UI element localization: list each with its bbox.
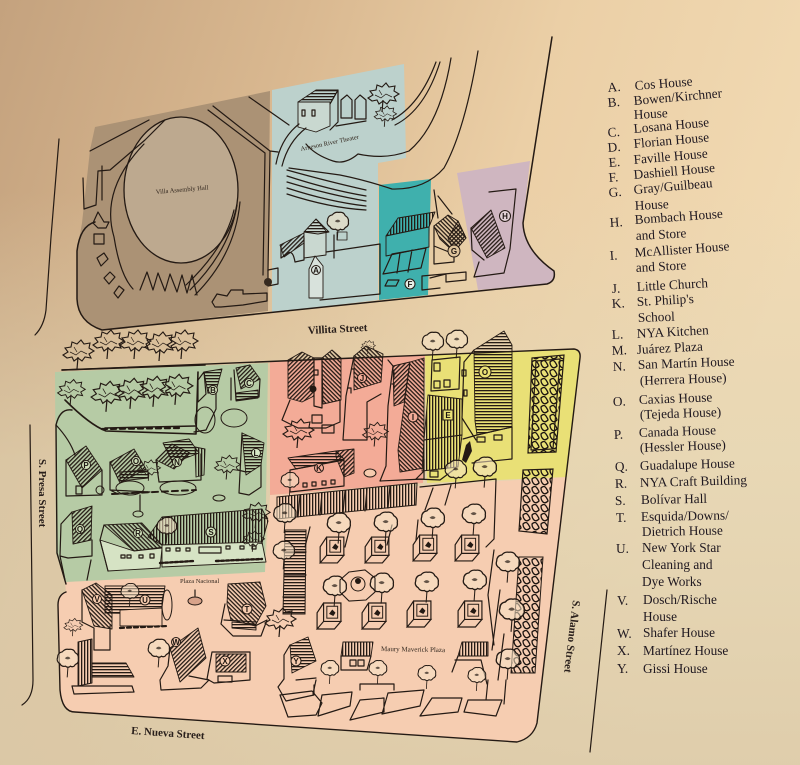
legend: building key: F. (608, 169, 619, 185)
building: I, McAllister House: I (412, 413, 414, 422)
tree rows at the north-west (58, 330, 198, 412)
legend: building key: Gissi House (643, 661, 708, 676)
zone: peach, plazas (58, 477, 567, 742)
building: U, Esquida/Downs/Dietrich: U (142, 596, 148, 605)
legend: building key: W. (617, 626, 632, 641)
building: B, Bowen/Kirchner House (194, 369, 222, 433)
legend: building key: (Herrera House) (640, 370, 727, 388)
building: C, Losana House: C (246, 379, 252, 388)
buildings in yellow zone (416, 330, 564, 534)
legend: building key: Losana House (633, 114, 710, 136)
west arcade (283, 530, 306, 614)
building: C, Losana House (221, 365, 260, 427)
legend: building key: School (638, 309, 675, 325)
street curbs (35, 51, 478, 335)
building: L, NYA Kitchen: L (254, 449, 259, 458)
bleacher structure (140, 272, 197, 295)
S. Alamo curb line (590, 590, 607, 752)
walls of hall grounds (90, 97, 289, 275)
building: O label tall house (462, 331, 512, 463)
legend: building key: P. (614, 427, 623, 442)
small pavilion west (341, 642, 373, 670)
zone: green, houses (55, 363, 268, 582)
building: O, Caxias House: O (133, 457, 139, 466)
south wall buildings (212, 290, 267, 307)
tree by Cos House (327, 212, 349, 240)
legend: building key: House (633, 105, 668, 122)
building: F, Dashiell House: F (408, 280, 413, 289)
fountain: Plaza Nacional (188, 590, 202, 605)
legend: building key: Florian House (633, 129, 710, 151)
legend: building key: (Hessler House) (640, 437, 726, 455)
legend: building key: St. Philip's (636, 291, 694, 309)
legend: building key: Caxias House (639, 389, 713, 407)
building: Y, Gissi House (278, 637, 316, 701)
garden bed middle (519, 469, 553, 534)
river bend (306, 58, 451, 162)
east trees (496, 552, 519, 583)
building: P, Canada House: P (83, 461, 89, 470)
legend: building key: Cleaning and (642, 557, 713, 572)
east pergola (305, 479, 496, 547)
central fountain (340, 570, 375, 601)
building: J, Little Church (343, 346, 383, 440)
building: north twin houses (282, 350, 341, 433)
building: X, Martínez House: X (222, 657, 228, 666)
building: W, Shafer House: W (172, 638, 180, 647)
building: Y, Gissi House: Y (293, 657, 299, 666)
legend: building key: (Tejeda House) (640, 404, 721, 422)
lane curve (62, 365, 205, 434)
legend: building key: M. (611, 342, 627, 358)
building: R, NYA Craft Building: R (135, 529, 141, 538)
building: O, Caxias House (110, 449, 150, 494)
legend: building key: B. (607, 94, 620, 110)
legend: building key: Gray/Guilbeau (633, 175, 713, 197)
building: L, NYA Kitchen (238, 433, 264, 495)
lower block outline (56, 349, 580, 742)
legend: building key: San Martín House (638, 354, 735, 372)
building: G, Gray/Guilbeau House (422, 190, 466, 290)
trees by E (445, 460, 467, 488)
building: Q, Guadalupe House: Q (77, 525, 83, 534)
legend: building key: and Store (635, 257, 687, 275)
building: P, Canada House (56, 425, 104, 496)
building: V, Dosch/Rische House (82, 583, 112, 650)
small pavilion east (452, 642, 488, 684)
legend: building key: G. (608, 184, 622, 200)
legend: building key: L. (611, 326, 624, 342)
zone: purple, Bombach House (457, 161, 554, 290)
label: Arneson River Theater: Arneson River Theater (300, 134, 360, 153)
east garden bed (511, 557, 543, 673)
building: S, Bolívar Hall (148, 509, 268, 567)
zone: pale blue, Arneson River Theater (272, 64, 406, 313)
building: R, NYA Craft Building (100, 523, 164, 571)
column garden: J, K (264, 268, 278, 286)
building: Q, Guadalupe House (60, 506, 92, 580)
legend: building key: Juárez Plaza (636, 339, 703, 357)
label: S. Alamo Street: S. Alamo Street (561, 600, 582, 674)
zone: teal, Dashiell House (379, 179, 431, 300)
legend: building key: R. (615, 476, 627, 491)
plaza planters, row two (317, 603, 341, 629)
building: U, Esquida/Downs/Dietrich (105, 586, 172, 628)
tree by W (148, 639, 170, 667)
panel: lower block (22, 330, 607, 752)
base near Q (133, 495, 143, 517)
buildings in pink zone (281, 340, 424, 496)
tree at west edge (57, 649, 79, 677)
outer arcs around hall (111, 144, 240, 295)
south planter row (280, 680, 506, 720)
legend: building key: J. (611, 281, 621, 296)
zone: pink, houses (270, 355, 425, 495)
legend: building key: U. (616, 541, 629, 556)
label: Villita Street: Villita Street (308, 322, 368, 337)
label: Plaza Nacional: Plaza Nacional (180, 578, 219, 585)
building: N, San Martín House (112, 439, 205, 495)
legend: building key: I. (609, 247, 618, 263)
legend: building key: NYA Kitchen (636, 322, 709, 341)
legend: building key: Bowen/Kirchner (633, 85, 723, 108)
building: X, Martínez House (207, 652, 250, 683)
legend: building key (607, 73, 748, 676)
legend: building key: H. (609, 214, 623, 230)
legend: building key: V. (617, 593, 628, 608)
legend: building key: Dietrich House (642, 523, 723, 539)
building: I, McAllister House (380, 358, 424, 481)
zone: yellow, houses (425, 349, 580, 483)
plaza trees, row one (274, 504, 296, 533)
legend: building key: E. (608, 154, 621, 170)
block outline (77, 37, 554, 330)
tree in front of houses (138, 460, 161, 481)
legend: building key: Q. (615, 459, 628, 474)
legend: building key: Dashiell House (633, 160, 716, 182)
legend: building key: Faville House (633, 146, 708, 167)
legend: building key: NYA Craft Building (640, 472, 748, 490)
plaza arcades and courtyard (273, 479, 543, 720)
label: Maury Maverick Plaza: Maury Maverick Plaza (381, 645, 446, 654)
building: T, Esquida House (221, 582, 267, 636)
trees by Y (265, 608, 296, 637)
building: E, Faville House (416, 395, 462, 480)
building: F, Dashiell House (383, 212, 435, 289)
Villa Assembly Hall circle (124, 117, 238, 263)
church: A, Cos House (280, 219, 380, 300)
legend: building key: Guadalupe House (640, 456, 735, 473)
church: A, Cos House: A (313, 266, 319, 275)
legend: building key: K. (611, 295, 625, 311)
legend: building key: McAllister House (634, 238, 730, 260)
legend: building key: House (634, 196, 669, 213)
legend: building key: D. (607, 139, 621, 155)
building: O label tall house: O (482, 368, 488, 377)
building: S, Bolívar Hall: S (208, 528, 214, 537)
building: B, Bowen/Kirchner House: B (210, 386, 216, 395)
building: K, St. Philip's School: K (316, 464, 322, 473)
legend: building key: New York Star (642, 540, 721, 555)
building: K, St. Philip's School (288, 449, 354, 492)
legend: building key: Little Church (636, 275, 709, 294)
south trees (321, 661, 339, 684)
garden bed north (528, 355, 564, 453)
legend: building key: Y. (617, 661, 628, 676)
legend: building key: Bolívar Hall (641, 491, 707, 507)
label: E. Nueva Street: E. Nueva Street (131, 725, 205, 742)
building: E, Faville House: E (445, 411, 451, 420)
zone: brown, Villa Assembly Hall (77, 91, 270, 330)
legend: building key: S. (615, 493, 626, 508)
east lane (488, 550, 504, 680)
small kiosks (93, 212, 124, 298)
legend: building key: C. (607, 124, 620, 140)
north arcade (277, 483, 417, 519)
theater trees (368, 83, 399, 112)
building: Shafer rear wing (72, 639, 134, 694)
tree and base near I (362, 422, 388, 477)
trees by Bolívar Hall (157, 517, 177, 543)
building: W, Shafer House (160, 628, 209, 690)
legend: building key: and Store (635, 225, 687, 243)
plaza planters, row one (320, 537, 344, 563)
legend: building key: Bombach House (634, 206, 723, 227)
legend: building key: Canada House (639, 422, 716, 440)
legend: building key: House (643, 609, 677, 624)
tree with round base near L (213, 455, 240, 501)
tree over U (121, 584, 139, 607)
S. Presa curb line (22, 425, 33, 705)
theater stage buildings (276, 90, 366, 166)
building: H, Bombach House (471, 189, 516, 277)
legend: building key: O. (613, 394, 626, 409)
building: G, Gray/Guilbeau House: G (451, 247, 457, 256)
legend: building key: Cos House (634, 73, 693, 93)
paths at left of hall (83, 120, 165, 209)
plaza trees, row two (323, 576, 346, 607)
legend: building key: Dye Works (642, 574, 702, 589)
tree on J (361, 340, 375, 354)
legend: building key: Shafer House (643, 625, 715, 640)
label: Villa Assembly Hall: Villa Assembly Hall (156, 184, 209, 196)
legend: building key: Dosch/Rische (643, 592, 717, 607)
legend: building key: Martínez House (643, 643, 728, 658)
building: T, Esquida House: T (245, 605, 250, 614)
building: V, Dosch/Rische House: V (94, 595, 100, 604)
theater seats (287, 170, 366, 210)
building: N, San Martín House: N (174, 458, 180, 467)
legend: building key: Esquida/Downs/ (641, 507, 729, 524)
legend: building key: A. (607, 79, 621, 95)
tree by K (281, 473, 299, 496)
building: J, Little Church: J (360, 374, 364, 383)
legend: building key: T. (616, 510, 627, 525)
legend: building key: N. (613, 359, 626, 374)
building: H, Bombach House: H (502, 212, 508, 221)
trees at north end (422, 332, 444, 360)
panel: upper block, Villita Street north (35, 37, 554, 335)
building: D, Florian House (431, 357, 460, 391)
label: S. Presa Street: S. Presa Street (36, 459, 48, 528)
legend: building key: X. (617, 643, 630, 658)
